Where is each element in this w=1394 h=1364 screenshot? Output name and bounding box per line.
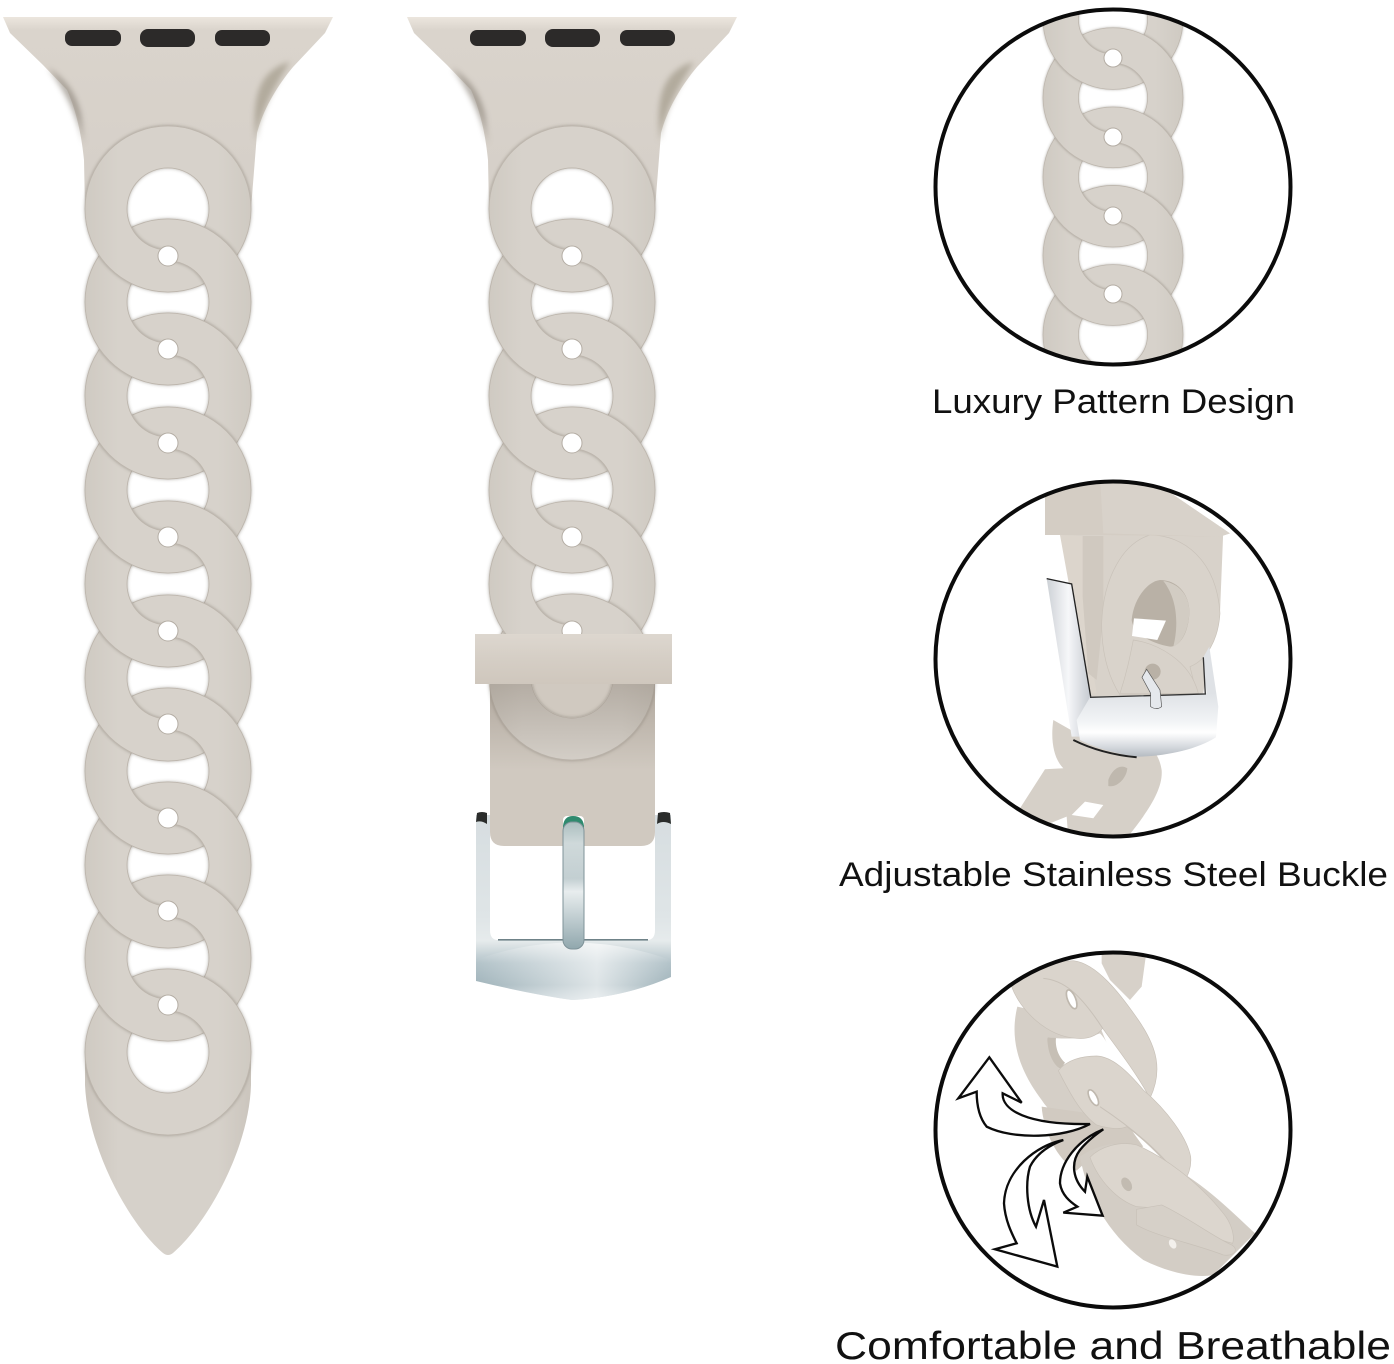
buckle bottom bar xyxy=(1077,647,1218,757)
zoomed buckle illustration xyxy=(1020,477,1230,838)
buckle side bar xyxy=(1047,579,1090,737)
strap keeper loop xyxy=(475,634,672,684)
oval ring xyxy=(1102,535,1220,695)
arrow: airflow down xyxy=(1060,1129,1103,1216)
interlocking chain links xyxy=(85,126,251,1135)
arrow: airflow down-left xyxy=(995,1140,1063,1267)
steel buckle frame xyxy=(476,812,671,1000)
zoomed chain links xyxy=(1041,14,1185,362)
detail circle: buckle xyxy=(936,477,1290,838)
detail circle: luxury pattern xyxy=(934,8,1292,366)
lower mass xyxy=(1082,1158,1255,1276)
circle outline xyxy=(936,482,1290,836)
strap body xyxy=(1060,530,1223,697)
middle link xyxy=(1058,1056,1191,1182)
buckle pin slot xyxy=(563,816,584,847)
arrow: airflow up-left xyxy=(958,1057,1090,1136)
top link xyxy=(1012,961,1157,1098)
third link xyxy=(1090,1144,1233,1243)
lower strap body xyxy=(490,676,655,846)
ring opening xyxy=(1132,580,1189,647)
label: buckle: Adjustable Stainless Steel Buckle xyxy=(839,856,1388,894)
back ring band xyxy=(1014,1006,1106,1112)
interlocking chain links xyxy=(489,126,655,760)
strap lug connector xyxy=(3,17,333,209)
lower chain link xyxy=(1020,720,1162,838)
strap lug connector xyxy=(407,17,737,209)
circle outline xyxy=(936,10,1290,364)
strap keeper xyxy=(1045,484,1230,536)
buckle pin xyxy=(563,816,584,949)
label: luxury pattern: Luxury Pattern Design xyxy=(932,383,1295,421)
lower back band xyxy=(1042,1107,1143,1171)
short strap with buckle xyxy=(407,17,737,1000)
fourth link xyxy=(1137,1205,1235,1255)
circle outline xyxy=(936,952,1290,1308)
link under buckle xyxy=(1120,640,1198,693)
twisted chain view xyxy=(1012,948,1255,1276)
shadow under keeper xyxy=(490,636,655,770)
long strap with pointed tip xyxy=(3,17,333,1255)
detail circle: comfort and breathability xyxy=(936,948,1290,1308)
strap pointed tip xyxy=(85,1052,251,1255)
buckle tongue xyxy=(1142,669,1162,709)
